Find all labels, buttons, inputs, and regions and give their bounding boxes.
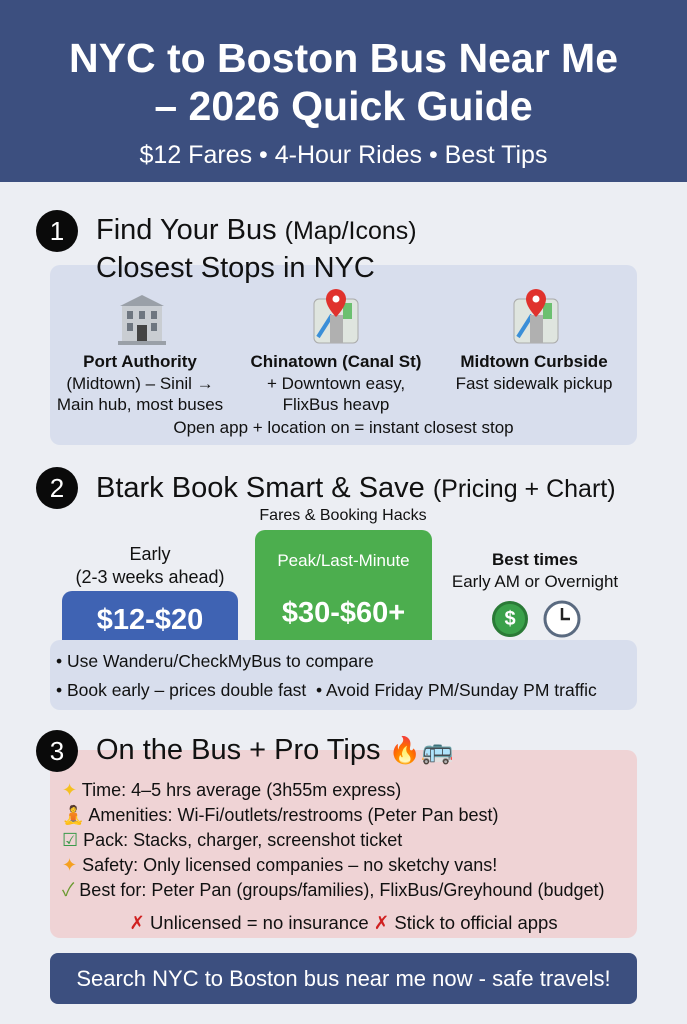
title: – 2026 Quick Guide: [154, 83, 533, 129]
stop: chinatown: Chinatown (Canal St): [251, 352, 421, 371]
stop: midtown curbside: [456, 352, 612, 392]
best times: Early AM or Overnight: [452, 572, 618, 591]
stop: port authority: Port Authority: [83, 352, 197, 371]
section 1 number: [36, 210, 78, 252]
icon: dollar: $: [504, 608, 516, 630]
icon: building: [118, 295, 166, 345]
section 2 number: 2: [50, 473, 64, 503]
bar: early price: $12-$20: [97, 604, 203, 636]
section 3 number: 3: [50, 736, 64, 766]
section 1 number: 1: [50, 216, 64, 246]
best times: Best times: [492, 550, 578, 569]
panel: pro tips: ☑ Pack: Stacks, charger, screenshot ticket: [62, 830, 402, 850]
stop: chinatown: + Downtown easy,: [267, 374, 405, 392]
panel: pro tips: ✓ Best for: Peter Pan (groups/families), FlixBus/Greyhound (budget): [62, 880, 605, 900]
panel: pro tips: ✦ Safety: Only licensed companies – no sketchy vans!: [62, 855, 497, 875]
section 2 heading: Btark Book Smart & Save (Pricing + Chart): [96, 472, 616, 504]
footer button: Search NYC to Boston bus near me now - safe travels!: [76, 966, 611, 991]
panel: pro tips: ✦ Time: 4–5 hrs average (3h55m express): [62, 780, 401, 800]
icon: map pin 2: [514, 289, 558, 344]
best times: [452, 550, 618, 591]
section 3 number: [36, 730, 78, 772]
bar: early price: [62, 591, 238, 641]
stop: port authority: (Midtown) – Sinil →: [66, 374, 214, 392]
section 2 number: [36, 467, 78, 509]
early label: Early: [129, 544, 170, 564]
note: Open app + location on = instant closest stop: [173, 418, 514, 437]
stop: port authority: [57, 352, 223, 414]
stop: chinatown: [251, 352, 421, 414]
bar: peak price: [255, 530, 432, 641]
subtitle: $12 Fares • 4-Hour Rides • Best Tips: [140, 141, 547, 169]
header banner: [0, 0, 687, 182]
icon: map pin 1: [314, 289, 358, 344]
stop: port authority: Main hub, most buses: [57, 395, 223, 414]
panel: booking tips: • Book early – prices double fast • Avoid Friday PM/Sunday PM traffic: [56, 680, 597, 700]
early label: [75, 544, 225, 587]
panel: booking tips: [50, 640, 637, 710]
icon: clock: [544, 600, 580, 638]
icon: dollar: [492, 601, 528, 637]
title: [69, 35, 618, 129]
panel: closest stops: [50, 265, 637, 445]
section 1 heading: Find Your Bus (Map/Icons): [96, 214, 417, 246]
stop: midtown curbside: Fast sidewalk pickup: [456, 374, 612, 392]
panel: pro tips: 🧘 Amenities: Wi-Fi/outlets/restrooms (Peter Pan best): [62, 805, 499, 825]
stop: chinatown: FlixBus heavp: [283, 395, 389, 414]
bar: peak price: $30-$60+: [282, 597, 405, 629]
title: NYC to Boston Bus Near Me: [69, 35, 618, 81]
stop: midtown curbside: Midtown Curbside: [460, 352, 608, 371]
early label: (2-3 weeks ahead): [75, 567, 225, 587]
footer button: [50, 953, 637, 1004]
section 3 heading: On the Bus + Pro Tips 🔥🚌: [96, 734, 453, 766]
panel: pro tips: [50, 750, 637, 938]
panel: booking tips: • Use Wanderu/CheckMyBus to compare: [56, 651, 374, 671]
bar: peak price: Peak/Last-Minute: [277, 551, 410, 570]
warning line: ✗ Unlicensed = no insurance ✗ Stick to official apps: [129, 912, 558, 933]
caption: Fares & Booking Hacks: [259, 507, 427, 524]
subheading closest stops: Closest Stops in NYC: [96, 252, 375, 284]
